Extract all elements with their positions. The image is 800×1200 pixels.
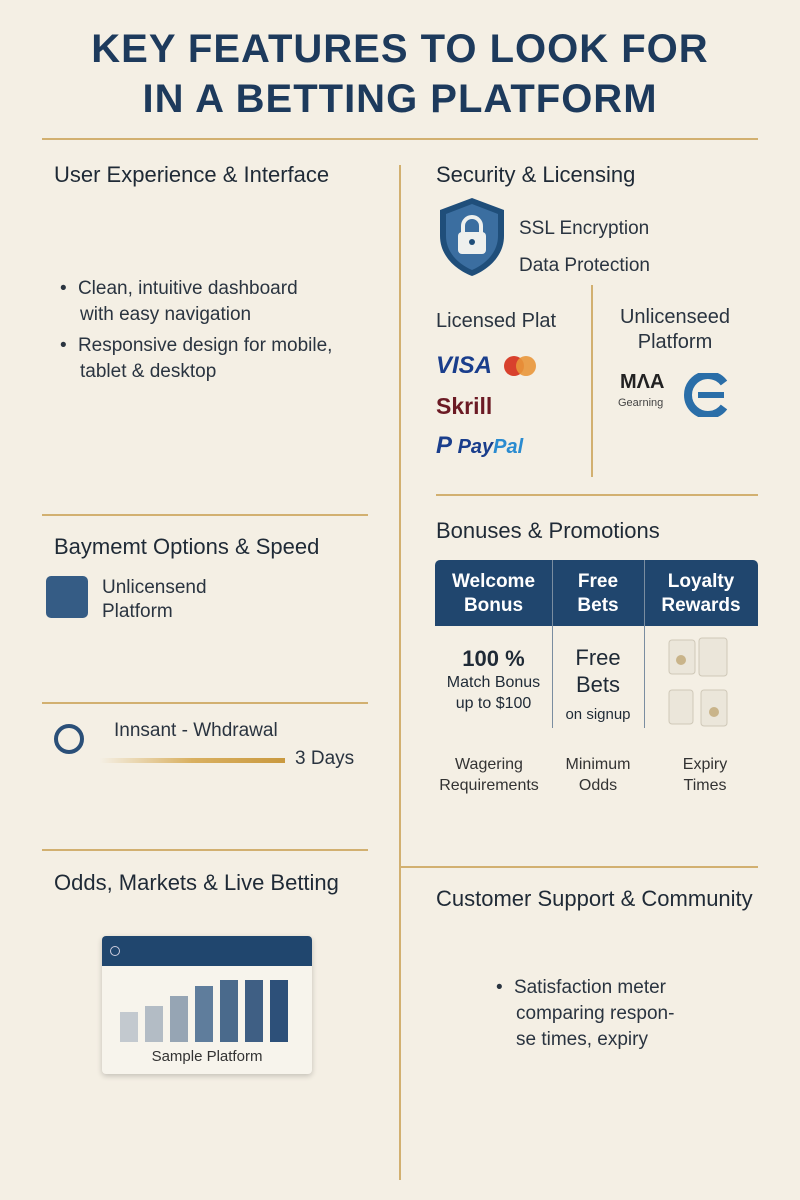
logo: paypal: P PayPal	[436, 432, 523, 459]
unlicensed column: Unlicenseed Platform	[620, 306, 730, 353]
text: ssl	[519, 218, 650, 276]
footnotes: Requirements	[439, 777, 539, 794]
table: Bets	[577, 595, 619, 616]
logo: visa mastercard: VISA	[436, 352, 492, 379]
bullet list	[60, 278, 332, 382]
heading: bonuses: Bonuses & Promotions	[436, 518, 660, 543]
panel: support	[436, 886, 753, 1050]
table: Bonus	[464, 595, 523, 616]
bullet: se times, expiry	[516, 1029, 648, 1050]
table: Free	[578, 571, 618, 592]
panel: bonuses: Times	[684, 777, 726, 794]
bar	[100, 758, 285, 763]
unlicensed column: Gearning	[618, 397, 663, 409]
table: Loyalty	[668, 571, 734, 592]
panel: user experience	[54, 162, 332, 382]
title	[91, 27, 709, 121]
panel: security	[436, 162, 730, 459]
table: Free	[575, 645, 621, 670]
bullet	[496, 977, 674, 1050]
panel: bonuses: Minimum	[566, 756, 630, 773]
title: IN A BETTING PLATFORM	[142, 77, 658, 121]
panel: payment	[46, 534, 319, 622]
table: Rewards	[661, 595, 741, 616]
icon: shield	[440, 198, 504, 276]
panel: odds	[54, 870, 339, 1078]
heading: user experience: User Experience & Interface	[54, 162, 329, 187]
table: Bets	[576, 672, 620, 697]
panel: bonuses	[435, 518, 758, 794]
unlicensed column	[618, 306, 730, 417]
bullet: comparing respon-	[516, 1003, 674, 1024]
table: on signup	[565, 706, 631, 723]
bullet list: tablet & desktop	[80, 361, 216, 382]
text: unlicensed	[102, 577, 207, 622]
licensed column: Licensed Plat	[436, 310, 556, 332]
table: Match Bonus	[447, 674, 540, 691]
logo: skrill: Skrill	[436, 393, 492, 419]
table: up to $100	[456, 695, 531, 712]
text: withdrawal: Innsant - Whdrawal	[114, 720, 278, 741]
footnotes: Wagering	[455, 756, 523, 773]
icon: loyalty cards	[668, 638, 728, 726]
table	[435, 560, 758, 728]
title: KEY FEATURES TO LOOK FOR	[91, 27, 709, 71]
logo: e	[684, 373, 728, 417]
chart: Sample Platform	[152, 1048, 262, 1065]
licensed column	[436, 310, 556, 459]
heading: odds: Odds, Markets & Live Betting	[54, 870, 339, 895]
bullet list: • Responsive design for mobile,	[60, 335, 332, 356]
chart	[102, 936, 312, 1074]
text: unlicensed: Unlicensend	[102, 577, 207, 598]
panel: withdrawal: 3 Days	[295, 748, 354, 769]
panel: bonuses: Expiry	[683, 756, 727, 773]
logo: mga: MΛA	[620, 371, 664, 393]
heading: support: Customer Support & Community	[436, 886, 753, 911]
footnotes	[439, 756, 539, 794]
bullet: • Satisfaction meter	[496, 977, 666, 998]
panel: withdrawal	[54, 720, 354, 769]
bullet list: with easy navigation	[80, 304, 251, 325]
table: 100 %	[462, 646, 525, 671]
table: Welcome	[452, 571, 535, 592]
bullet list: • Clean, intuitive dashboard	[60, 278, 298, 299]
icon: square	[46, 576, 88, 618]
text: unlicensed: Platform	[102, 601, 173, 622]
text: ssl: SSL Encryption	[519, 218, 649, 239]
heading: security: Security & Licensing	[436, 162, 635, 187]
text: ssl: Data Protection	[519, 255, 650, 276]
panel: bonuses: Odds	[579, 777, 617, 794]
heading: payment: Baymemt Options & Speed	[54, 534, 319, 559]
icon: ring	[54, 724, 84, 754]
